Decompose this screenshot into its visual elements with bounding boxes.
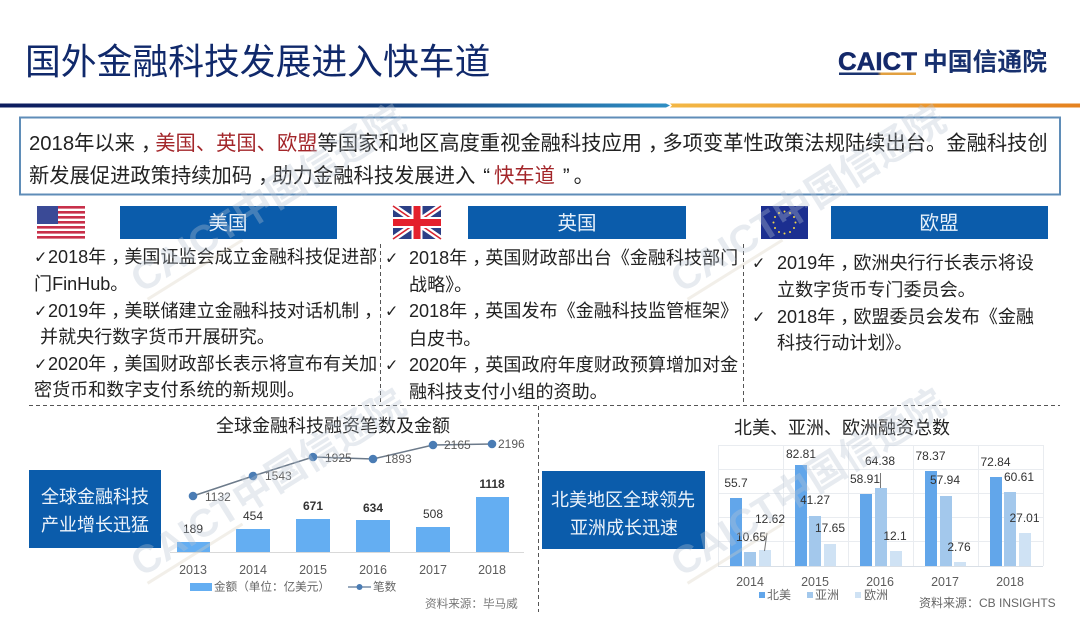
text block: EU policies: 2019年 ，欧洲央行行长表示将设 <box>777 253 1034 273</box>
icon: UK flag <box>393 206 441 239</box>
watermarks: CAICT <box>124 202 248 301</box>
text block: UK policies: ✓ <box>385 356 398 374</box>
bar values: 41.27 <box>800 493 830 507</box>
text block: UK policies: 2018年 ，英国发布《金融科技监管框架》 <box>409 301 738 321</box>
line: deal counts <box>189 437 525 504</box>
bars: North America <box>730 465 1002 566</box>
heading: 英国: 英国 <box>557 212 597 234</box>
watermarks: 中国信通院 <box>225 98 414 238</box>
legend <box>759 588 888 602</box>
legend <box>190 580 397 594</box>
bars: amount <box>177 497 509 552</box>
bars: Europe <box>759 533 1031 566</box>
bar values: 10.65 <box>736 530 766 544</box>
year axis: 2016 <box>866 575 894 589</box>
year axis <box>736 575 1024 589</box>
bar values <box>724 447 1040 554</box>
callout: global fintech growth <box>29 470 161 548</box>
bar values: 55.7 <box>724 476 748 490</box>
legend: 笔数 <box>373 580 397 594</box>
year axis: 2016 <box>359 563 387 577</box>
text block: US policies: 密货币和数字支付系统的新规则。 <box>34 380 305 400</box>
line: deal counts: 1132 <box>205 490 231 504</box>
bar values: 27.01 <box>1009 511 1040 525</box>
year axis: 2017 <box>931 575 959 589</box>
callout: North America leads: 北美地区全球领先 <box>551 490 695 510</box>
heading: 欧盟 <box>831 206 1048 239</box>
watermarks <box>124 98 954 586</box>
bar values: 60.61 <box>1004 470 1034 484</box>
year axis: 2015 <box>299 563 327 577</box>
intro text box: 2018年以来 ，美国、英国、欧盟等国家和地区高度重视金融科技应用 ，多项变革性政策法规陆续出台。金融科技创 <box>29 132 1048 155</box>
intro text box: 新发展促进政策持续加码 ，助力金融科技发展进入 “快车道 ”。 <box>29 164 594 188</box>
callout: North America leads: 亚洲成长迅速 <box>570 518 678 538</box>
text block: UK policies: 2018年 ，英国财政部出台《金融科技部门 <box>409 248 738 268</box>
intro text box <box>20 118 1060 194</box>
text block: EU policies: ✓ <box>752 254 765 272</box>
heading: 美国: 美国 <box>208 212 248 234</box>
year axis: 2014 <box>239 563 267 577</box>
watermarks: CAICT <box>664 486 788 585</box>
legend: 亚洲 <box>815 588 839 602</box>
logo: CAICT <box>838 48 1047 76</box>
chart: global fintech funding deals and amount <box>170 416 525 610</box>
line: deal counts: 1893 <box>385 452 412 466</box>
bar values: 17.65 <box>815 521 845 535</box>
legend: 北美 <box>767 588 791 602</box>
text block: US policies: 2018年 ，美国证监会成立金融科技促进部 <box>48 247 377 267</box>
line: deal counts: 2165 <box>444 438 471 452</box>
text block: EU policies: 立数字货币专门委员会。 <box>777 280 976 300</box>
bar values: 12.62 <box>755 512 785 526</box>
bar values: 671 <box>303 499 323 513</box>
bar values: 64.38 <box>865 454 895 468</box>
bar values: 1118 <box>479 477 505 491</box>
text block: EU policies: 科技行动计划》。 <box>777 333 912 353</box>
callout: North America leads <box>542 471 705 549</box>
text block: US policies: 2020年 ，美国财政部长表示将宣布有关加 <box>48 354 377 374</box>
text block: EU policies <box>752 253 1034 353</box>
chart: funding totals by region <box>718 418 1056 610</box>
text block: UK policies: ✓ <box>385 248 398 268</box>
line: deal counts: 1543 <box>265 469 292 483</box>
legend: 欧洲 <box>864 588 888 602</box>
logo: CAICT: CAICT <box>838 48 917 76</box>
year axis: 2014 <box>736 575 764 589</box>
text block: UK policies: ✓ <box>385 302 398 320</box>
bar values: 634 <box>363 501 383 515</box>
text block: UK policies <box>385 248 738 402</box>
source note: 资料来源：CB INSIGHTS <box>919 596 1056 610</box>
icon: US flag <box>37 206 85 239</box>
text block: EU policies: ✓ <box>752 308 765 326</box>
icon: EU flag <box>761 206 808 239</box>
logo: CAICT: 中国信通院 <box>923 48 1047 76</box>
chart title: 全球金融科技融资笔数及金额 <box>216 416 450 436</box>
text block: UK policies: 白皮书。 <box>409 329 481 349</box>
watermarks: 中国信通院 <box>225 382 414 522</box>
chart title: 北美、亚洲、欧洲融资总数 <box>734 418 950 438</box>
line: deal counts: 2196 <box>498 437 525 451</box>
text block: UK policies: 战略》。 <box>409 275 472 295</box>
heading: 美国 <box>120 206 337 239</box>
year axis: 2018 <box>478 563 506 577</box>
text block: US policies <box>34 247 382 400</box>
watermarks: 中国信通院 <box>765 382 954 522</box>
bar values: 57.94 <box>930 473 960 487</box>
source note: 资料来源：毕马威 <box>425 596 518 610</box>
legend: 金额（单位：亿美元） <box>214 580 330 594</box>
text block: US policies: 2019年 ，美联储建立金融科技对话机制 ， <box>48 301 382 321</box>
bar values: 508 <box>423 507 443 521</box>
bar values: 454 <box>243 509 263 523</box>
bar values: 189 <box>183 522 203 536</box>
header divider line <box>0 104 1080 108</box>
year axis: 2017 <box>419 563 447 577</box>
year axis: 2018 <box>996 575 1024 589</box>
bar values: 82.81 <box>786 447 816 461</box>
text block: US policies: ✓ <box>34 302 47 320</box>
line: deal counts: 1925 <box>325 451 352 465</box>
bar values <box>183 477 505 536</box>
heading: 欧盟: 欧盟 <box>919 212 959 234</box>
bars: Asia <box>744 488 1016 566</box>
text block: US policies: 并就央行数字货币开展研究。 <box>40 327 275 347</box>
text block: UK policies: 融科技支付小组的资助。 <box>409 382 608 402</box>
bar values: 72.84 <box>980 455 1011 469</box>
year axis: 2015 <box>801 575 829 589</box>
heading: 英国 <box>468 206 686 239</box>
text block: US policies: ✓ <box>34 354 47 374</box>
callout: global fintech growth: 全球金融科技 <box>41 487 149 507</box>
text block: UK policies: 2020年 ，英国政府年度财政预算增加对金 <box>409 355 738 375</box>
text block: US policies: 门FinHub。 <box>34 274 128 294</box>
watermarks: CAICT <box>124 486 248 585</box>
bar values: 12.1 <box>883 529 907 543</box>
bar values: 58.91 <box>850 472 880 486</box>
title: 国外金融科技发展进入快车道 <box>25 42 490 82</box>
year axis: 2013 <box>179 563 207 577</box>
text block: US policies: ✓ <box>34 248 47 266</box>
bar values: 78.37 <box>915 449 946 463</box>
year axis <box>179 563 506 577</box>
watermarks: CAICT <box>664 202 788 301</box>
text block: EU policies: 2018年 ，欧盟委员会发布《金融 <box>777 307 1034 327</box>
watermarks: 中国信通院 <box>765 98 954 238</box>
callout: global fintech growth: 产业增长迅猛 <box>41 515 149 535</box>
bar values: 2.76 <box>947 540 971 554</box>
